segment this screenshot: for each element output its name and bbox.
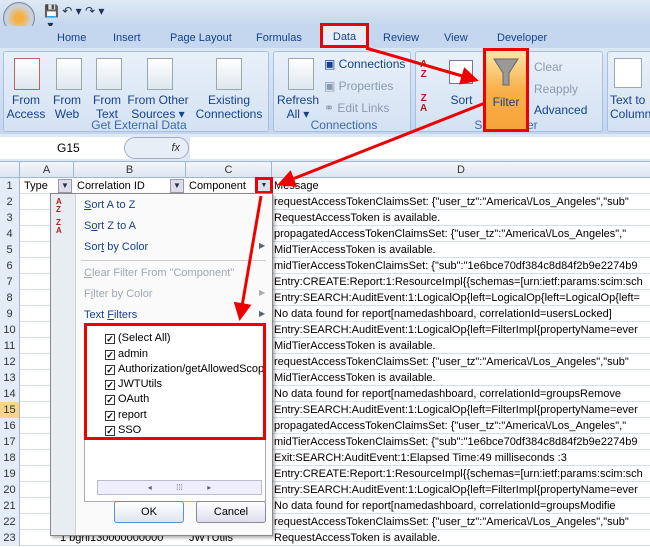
grid rows: midTierAccessTokenClaimsSet: {"sub":"1e6bce70df384c8d84f2b9e2274b9 [274, 436, 638, 448]
tabs bar: Home [57, 32, 86, 44]
arrow: dropdown to checkbox list [240, 196, 261, 318]
grid rows: 10 [3, 324, 16, 336]
grid rows: 5 [6, 244, 13, 256]
red highlight box around checkbox list [84, 323, 266, 440]
group: Get External Data: From Other [127, 93, 189, 107]
tabs bar: Review [383, 32, 419, 44]
group: Sort & Filter: Sort [450, 93, 472, 107]
grid rows: Message [274, 180, 319, 192]
Cancel button: Cancel [214, 506, 248, 518]
checkbox list: ✓ [106, 334, 114, 344]
checkbox list: (Select All) [118, 332, 171, 344]
OK button: OK [141, 506, 157, 518]
group: Get External Data: Connections [196, 107, 262, 121]
grid rows: propagatedAccessTokenClaimsSet: {"user_tz":"America\/Los_Angeles"," [274, 228, 626, 240]
grid rows: 2 [6, 196, 13, 208]
tabs bar: Developer [497, 32, 547, 44]
group: Sort & Filter: A [420, 59, 427, 70]
filter dropdown menu: Sort by Color [84, 241, 148, 253]
group: Get External Data: Existing [208, 93, 250, 107]
group: Sort & Filter: Reapply [534, 82, 578, 96]
filter dropdown menu: ▶ [259, 241, 265, 250]
group: Sort & Filter: A [420, 103, 427, 114]
group: Connections: ▣ Properties [324, 79, 393, 93]
grid rows: No data found for report[namedashboard, correlationId=groupsRemove [274, 388, 621, 400]
group: Connections: Refresh [277, 93, 319, 107]
filter dropdown menu: ▶ [259, 288, 265, 297]
checkbox list: SSO [118, 424, 141, 436]
Filter button highlighted: Filter [493, 95, 519, 109]
grid rows: 14 [3, 388, 16, 400]
filter dropdown menu [50, 193, 273, 536]
group: Connections: ▣ Connections [324, 57, 405, 71]
formula bar: fx [171, 142, 180, 154]
group: Get External Data: Text [96, 107, 118, 121]
grid rows: 17 [3, 436, 16, 448]
quick access toolbar: 💾 ↶ ▾ ↷ ▾ ▾ [44, 4, 104, 32]
group: Sort & Filter [415, 51, 603, 132]
group: Sort & Filter: Z [421, 93, 427, 104]
grid rows: JWTUtils [189, 532, 233, 544]
group: Connections: Connections [311, 118, 377, 132]
filter dropdown menu: Filter by Color [84, 288, 152, 300]
column headers: C [225, 164, 232, 176]
arrow: Filter to column dropdown [280, 103, 485, 184]
grid rows: 8 [6, 292, 13, 304]
group: Get External Data: From [93, 93, 121, 107]
column headers: B [126, 164, 133, 176]
grid rows: 23 [3, 532, 16, 544]
checkbox list: report [118, 409, 147, 421]
grid rows: ▼ [61, 181, 69, 190]
checkbox list: ◂ ⁞⁞⁞ ▸ [148, 483, 211, 492]
grid rows: 15 [3, 404, 16, 416]
checkbox list: ✓ [106, 411, 114, 421]
group: Get External Data: Web [55, 107, 79, 121]
checkbox list: admin [118, 348, 148, 360]
grid rows: MidTierAccessToken is available. [274, 244, 436, 256]
checkbox list: ✓ [106, 350, 114, 360]
checkbox list: OAuth [118, 393, 149, 405]
checkbox list: ✓ [106, 365, 114, 375]
office button [3, 2, 35, 34]
group: Get External Data: Get External Data [91, 118, 187, 132]
grid rows: Entry:CREATE:Report:1:ResourceImpl{{schemas=[urn:ietf:params:scim:sch [274, 468, 643, 480]
checkbox list: ✓ [106, 426, 114, 436]
group: Sort & Filter: Z [421, 69, 427, 80]
grid rows: 3 [6, 212, 13, 224]
group: Get External Data: Access [7, 107, 45, 121]
grid rows: 13 [3, 372, 16, 384]
tabs bar: Formulas [256, 32, 302, 44]
grid rows: 20 [3, 484, 16, 496]
formula bar: ▾ [140, 141, 146, 155]
grid rows: 22 [3, 516, 16, 528]
grid rows: Entry:SEARCH:AuditEvent:1:LogicalOp{left=FilterImpl{propertyName=ever [274, 404, 638, 416]
Filter button highlighted [483, 48, 529, 132]
filter dropdown menu: Text Filters [84, 309, 137, 321]
group: Sort & Filter: Advanced [534, 103, 587, 117]
column headers [0, 162, 650, 178]
grid rows: propagatedAccessTokenClaimsSet: {"user_tz":"America\/Los_Angeles"," [274, 420, 626, 432]
arrow: Data tab to Filter [366, 48, 476, 80]
group: Connections: All ▾ [287, 107, 309, 121]
grid rows: ▼ [173, 181, 181, 190]
tabs bar: View [444, 32, 468, 44]
group: Get External Data: Sources ▾ [131, 107, 185, 121]
filter dropdown menu: A [56, 226, 62, 235]
grid rows: 6 [6, 260, 13, 272]
grid rows: RequestAccessToken is available. [274, 532, 440, 544]
Data tab highlighted [320, 23, 369, 48]
formula bar [0, 134, 650, 162]
grid rows: 18 [3, 452, 16, 464]
grid rows: Component [189, 180, 246, 192]
checkbox list: ✓ [106, 380, 114, 390]
grid rows: 9 [6, 308, 13, 320]
grid rows: 1 [6, 180, 13, 192]
filter dropdown menu: Clear Filter From "Component" [84, 267, 234, 279]
title bar [0, 0, 650, 26]
grid rows: Exit:SEARCH:AuditEvent:1:Elapsed Time:49 milliseconds :3 [274, 452, 567, 464]
grid rows: requestAccessTokenClaimsSet: {"user_tz":"America\/Los_Angeles","sub" [274, 516, 629, 528]
grid rows: 1 bgrii130000000000 [60, 532, 163, 544]
grid rows: 19 [3, 468, 16, 480]
grid rows: 21 [3, 500, 16, 512]
grid rows: midTierAccessTokenClaimsSet: {"sub":"1e6bce70df384c8d84f2b9e2274b9 [274, 260, 638, 272]
tabs bar: Insert [113, 32, 141, 44]
grid rows: Entry:SEARCH:AuditEvent:1:LogicalOp{left=FilterImpl{propertyName=ever [274, 484, 638, 496]
Cancel button [196, 501, 266, 523]
tabs bar [0, 26, 650, 48]
formula bar: G15 [57, 141, 80, 155]
grid rows: No data found for report[namedashboard, correlationId=usersLocked] [274, 308, 612, 320]
group: Sort & Filter: Sort & Filter [474, 118, 538, 132]
grid rows: 12 [3, 356, 16, 368]
group: Data tools partial [607, 51, 650, 132]
group: Sort & Filter: Clear [534, 60, 563, 74]
grid rows: 4 [6, 228, 13, 240]
OK button [114, 501, 184, 523]
filter dropdown menu: Z [56, 218, 61, 227]
column headers: A [43, 164, 50, 176]
checkbox list [84, 324, 266, 502]
checkbox list: JWTUtils [118, 378, 162, 390]
grid rows: Type [24, 180, 48, 192]
tabs bar: Page Layout [170, 32, 232, 44]
grid rows: RequestAccessToken is available. [274, 212, 440, 224]
grid rows: 16 [3, 420, 16, 432]
grid rows: Entry:SEARCH:AuditEvent:1:LogicalOp{left=LogicalOp{left=LogicalOp{left= [274, 292, 640, 304]
grid rows: Entry:SEARCH:AuditEvent:1:LogicalOp{left=FilterImpl{propertyName=ever [274, 324, 638, 336]
grid rows: MidTierAccessToken is available. [274, 340, 436, 352]
grid rows: MidTierAccessToken is available. [274, 372, 436, 384]
filter dropdown menu: A [56, 197, 62, 206]
filter dropdown menu: Z [56, 205, 61, 214]
Data tab highlighted: Data [333, 31, 356, 43]
component dropdown button highlighted [255, 177, 273, 194]
group: Get External Data: From [53, 93, 81, 107]
group: Data tools partial: Text to [610, 93, 645, 107]
checkbox list: ✓ [106, 395, 114, 405]
column headers: D [457, 164, 465, 176]
grid rows: 11 [4, 340, 15, 352]
filter dropdown menu: Sort A to Z [84, 199, 135, 211]
grid rows: Entry:CREATE:Report:1:ResourceImpl{{schemas=[urn:ietf:params:scim:sch [274, 276, 643, 288]
group: Get External Data: From [12, 93, 40, 107]
grid rows: No data found for report[namedashboard, correlationId=groupsModifie [274, 500, 616, 512]
ribbon [0, 48, 650, 134]
group: Connections: ⚭ Edit Links [324, 101, 389, 115]
group: Get External Data [3, 51, 269, 132]
grid rows: Correlation ID [77, 180, 145, 192]
grid rows: requestAccessTokenClaimsSet: {"user_tz":"America\/Los_Angeles","sub" [274, 196, 629, 208]
grid rows: 7 [6, 276, 13, 288]
grid rows: requestAccessTokenClaimsSet: {"user_tz":"America\/Los_Angeles","sub" [274, 356, 629, 368]
grid rows [0, 178, 650, 546]
filter dropdown menu: ▶ [259, 309, 265, 318]
filter dropdown menu: Sort Z to A [84, 220, 136, 232]
component dropdown button highlighted: ▼ [261, 182, 267, 189]
group: Connections [273, 51, 411, 132]
